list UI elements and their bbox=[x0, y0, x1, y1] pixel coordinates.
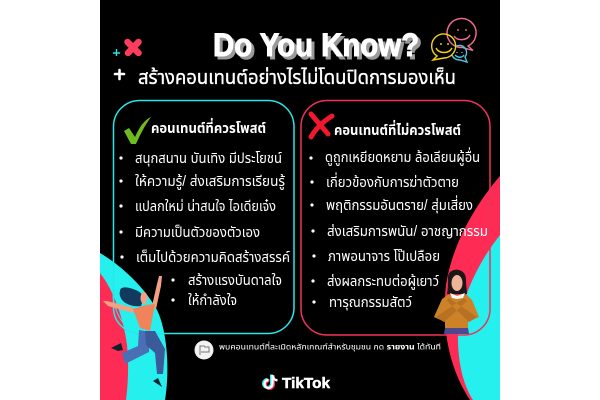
torso bbox=[133, 304, 155, 331]
skirt bbox=[444, 328, 469, 334]
panel: should not post bbox=[301, 100, 490, 335]
icon: pink chat face bbox=[447, 19, 476, 50]
icon: yellow chat face bbox=[432, 34, 456, 60]
title: Do You Know? bbox=[213, 27, 419, 63]
footer: report note bbox=[194, 340, 441, 360]
arms bbox=[103, 276, 162, 313]
back leg bbox=[122, 330, 150, 364]
list: should post: ให้กำลังใจ bbox=[188, 293, 237, 309]
sparkle: cyan plus bbox=[113, 49, 120, 56]
list: should not post: ภาพอนาจาร โป๊เปลือย bbox=[328, 248, 440, 265]
list: should not post: ทารุณกรรมสัตว์ bbox=[329, 295, 412, 311]
heading: should post: คอนเทนต์ที่ควรโพสต์ bbox=[151, 117, 266, 137]
list: should post: แปลกใหม่ น่าสนใจ ไอเดียเจ๋ง bbox=[135, 198, 276, 215]
icon: green check bbox=[124, 117, 151, 144]
footer text: พบคอนเทนต์ที่ละเมิดหลักเกณฑ์สำหรับชุมชน กด รายงาน ได้ทันที bbox=[219, 340, 441, 352]
logo: TikTok bbox=[264, 374, 331, 392]
list: should post: สร้างแรงบันดาลใจ bbox=[188, 273, 282, 289]
icon: music note bbox=[264, 374, 278, 388]
title: Do You Know? bbox=[216, 30, 422, 66]
front leg bbox=[145, 331, 165, 374]
list: should post: มีความเป็นตัวของตัวเอง bbox=[135, 224, 260, 241]
heading: should not post: คอนเทนต์ที่ไม่ควรโพสต์ bbox=[334, 119, 461, 139]
background panel bbox=[100, 0, 500, 400]
subtitle: สร้างคอนเทนต์อย่างไรไม่โดนปิดการมองเห็น bbox=[138, 66, 456, 89]
decorative shapes: right bottom bbox=[445, 176, 500, 400]
icon: chat faces bbox=[432, 19, 476, 62]
collar bbox=[450, 293, 465, 299]
list: should post: สนุกสนาน บันเทิง มีประโยชน์ bbox=[135, 151, 282, 167]
illustration: jumping woman bbox=[103, 276, 165, 387]
face bbox=[140, 292, 148, 304]
panel: should post bbox=[114, 100, 294, 334]
top bbox=[434, 295, 479, 328]
list: should not post: เกี่ยวข้องกับการฆ่าตัวตาย bbox=[326, 172, 459, 191]
face bbox=[452, 275, 462, 291]
list: should not post: พฤติกรรมอันตราย/ สุ่มเสี่ยง bbox=[326, 195, 473, 214]
list: should post bbox=[119, 151, 290, 309]
list: should post: ให้ความรู้/ ส่งเสริมการเรียนรู้ bbox=[135, 173, 286, 190]
sparkle: white plus bbox=[115, 70, 124, 79]
icon: red cross bbox=[311, 114, 332, 137]
crossed hands bbox=[436, 298, 477, 322]
illustration: woman crossing arms bbox=[434, 270, 479, 334]
hair bbox=[120, 287, 144, 306]
list: should post: เต็มไปด้วยความคิดสร้างสรรค์ bbox=[136, 250, 290, 266]
list: should not post: ส่งผลกระทบต่อผู้เยาว์ bbox=[327, 273, 439, 290]
icon: blue chat face bbox=[452, 45, 467, 62]
wordmark: TikTok bbox=[282, 375, 331, 392]
icon: flag badge bbox=[194, 340, 214, 360]
hair bbox=[447, 270, 467, 294]
list: should not post: ดูถูกเหยียดหยาม ล้อเลียนผู้อื่น bbox=[325, 147, 480, 166]
shoes bbox=[111, 343, 162, 387]
list: should not post bbox=[309, 147, 488, 311]
list: should not post: ส่งเสริมการพนัน/ อาชญากรรม bbox=[327, 223, 488, 240]
decorative shapes: left bottom bbox=[100, 253, 167, 400]
sparkle: pink cross bbox=[128, 42, 138, 53]
